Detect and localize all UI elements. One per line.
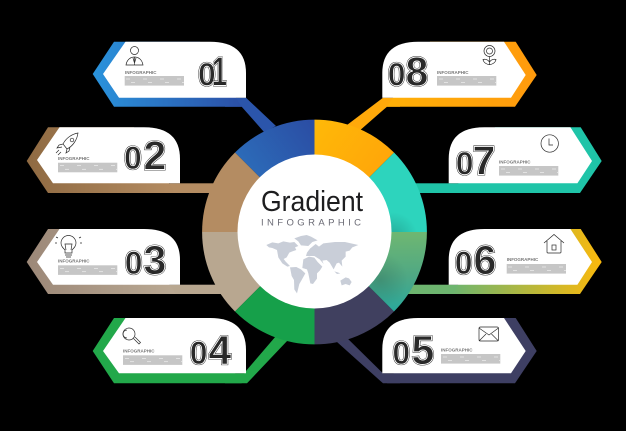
number 02: 2 <box>144 132 166 178</box>
text placeholder 04 <box>123 355 182 365</box>
label 03: INFOGRAPHIC <box>58 259 90 264</box>
central ring <box>202 120 427 344</box>
connector 04 <box>225 336 288 383</box>
white panel 06 <box>449 229 592 285</box>
centre disc <box>238 154 392 308</box>
card 04 <box>93 318 288 383</box>
segment 04 <box>235 232 314 344</box>
number 04: 0 <box>190 335 207 371</box>
card 07 <box>405 127 602 193</box>
label 07: INFOGRAPHIC <box>499 159 531 164</box>
title: Gradient <box>261 186 363 218</box>
number 04: 0 <box>190 335 207 371</box>
number 06 <box>455 237 496 283</box>
white panel 01 <box>103 42 246 98</box>
number 08: 8 <box>406 49 428 95</box>
number 05: 0 <box>392 335 410 371</box>
number 02: 0 <box>124 140 142 176</box>
label 08: INFOGRAPHIC <box>437 70 469 75</box>
card 02 <box>27 127 230 193</box>
number 03: 0 <box>125 245 142 281</box>
text placeholder 07 <box>499 166 558 176</box>
icon: light bulb <box>55 236 82 257</box>
label 06: INFOGRAPHIC <box>507 257 539 262</box>
icon: magnifier <box>123 328 140 344</box>
number 05 <box>392 327 434 373</box>
subtitle: INFOGRAPHIC <box>261 218 361 229</box>
label 04: INFOGRAPHIC <box>123 349 155 354</box>
card 01 <box>93 42 276 132</box>
segment 06 <box>314 232 427 312</box>
connector 03 <box>170 285 230 294</box>
number 03 <box>125 237 166 283</box>
white panel 02 <box>37 127 180 183</box>
connector 02 <box>170 183 230 193</box>
number 06: 6 <box>474 237 496 283</box>
label 01: INFOGRAPHIC <box>125 70 157 75</box>
card 05 <box>337 318 537 383</box>
number 05: 0 <box>392 335 410 371</box>
icon: envelope <box>479 327 498 341</box>
number 05: 5 <box>412 327 434 373</box>
white panel 03 <box>37 229 180 285</box>
segment 08 <box>314 120 394 232</box>
number 08: 0 <box>388 57 405 93</box>
number 08: 8 <box>406 49 428 95</box>
number 07 <box>456 138 495 184</box>
icon: house <box>544 234 564 253</box>
number 01: 0 <box>198 57 216 93</box>
card 06 <box>405 229 602 294</box>
white panel 05 <box>382 318 526 373</box>
segment 03 <box>202 232 314 312</box>
text placeholder 05 <box>441 354 500 364</box>
number 01: 1 <box>212 49 227 95</box>
text placeholder 02 <box>58 163 117 172</box>
icon: person <box>126 46 143 65</box>
number 06: 0 <box>455 245 472 281</box>
number 07: 0 <box>456 146 473 182</box>
connector 08 <box>347 98 400 132</box>
icon: money plant <box>483 46 496 65</box>
card frame 04 <box>93 318 242 383</box>
number 05: 5 <box>412 327 434 373</box>
icon: rocket <box>56 133 78 155</box>
card 08 <box>347 42 537 132</box>
text placeholder 08 <box>437 76 496 86</box>
label 02: INFOGRAPHIC <box>58 156 90 161</box>
white panel 07 <box>449 127 592 183</box>
number 03: 3 <box>144 237 166 283</box>
segment 01 <box>235 120 314 232</box>
world map <box>266 235 358 293</box>
icon: clock <box>541 135 558 152</box>
number 01: 0 <box>198 57 216 93</box>
number 02 <box>124 132 166 178</box>
number 04: 4 <box>208 327 232 373</box>
segment 02 <box>202 152 314 232</box>
number 06: 0 <box>455 245 472 281</box>
number 02: 0 <box>124 140 142 176</box>
card frame 07 <box>452 127 602 193</box>
connector 07 <box>405 183 465 193</box>
number 07: 0 <box>456 146 473 182</box>
card frame 02 <box>27 127 176 193</box>
text placeholder 01 <box>125 76 184 86</box>
connector 05 <box>337 334 400 383</box>
number 07: 7 <box>472 138 495 184</box>
card 03 <box>27 229 230 294</box>
number 04: 4 <box>208 327 232 373</box>
connector 01 <box>225 98 276 132</box>
segment 05 <box>314 232 394 344</box>
card frame 03 <box>27 229 176 294</box>
number 01: 1 <box>212 49 227 95</box>
shadow on segment 06 <box>314 232 427 312</box>
connector 06 <box>405 285 465 294</box>
label 05: INFOGRAPHIC <box>441 347 473 352</box>
segment 07 <box>314 152 427 232</box>
number 04 <box>190 327 232 373</box>
white panel 08 <box>382 42 526 98</box>
number 07: 7 <box>472 138 495 184</box>
text placeholder 06 <box>507 264 566 274</box>
number 03: 3 <box>144 237 166 283</box>
number 06: 6 <box>474 237 496 283</box>
number 03: 0 <box>125 245 142 281</box>
card frame 06 <box>452 229 602 294</box>
text placeholder 03 <box>58 265 117 275</box>
number 01 <box>198 49 227 95</box>
white panel 04 <box>103 318 246 373</box>
number 08 <box>388 49 428 95</box>
number 08: 0 <box>388 57 405 93</box>
card frame 01 <box>93 42 242 107</box>
number 02: 2 <box>144 132 166 178</box>
shadow on segment 07 <box>314 152 427 232</box>
card frame 05 <box>387 318 537 383</box>
card frame 08 <box>387 42 537 107</box>
